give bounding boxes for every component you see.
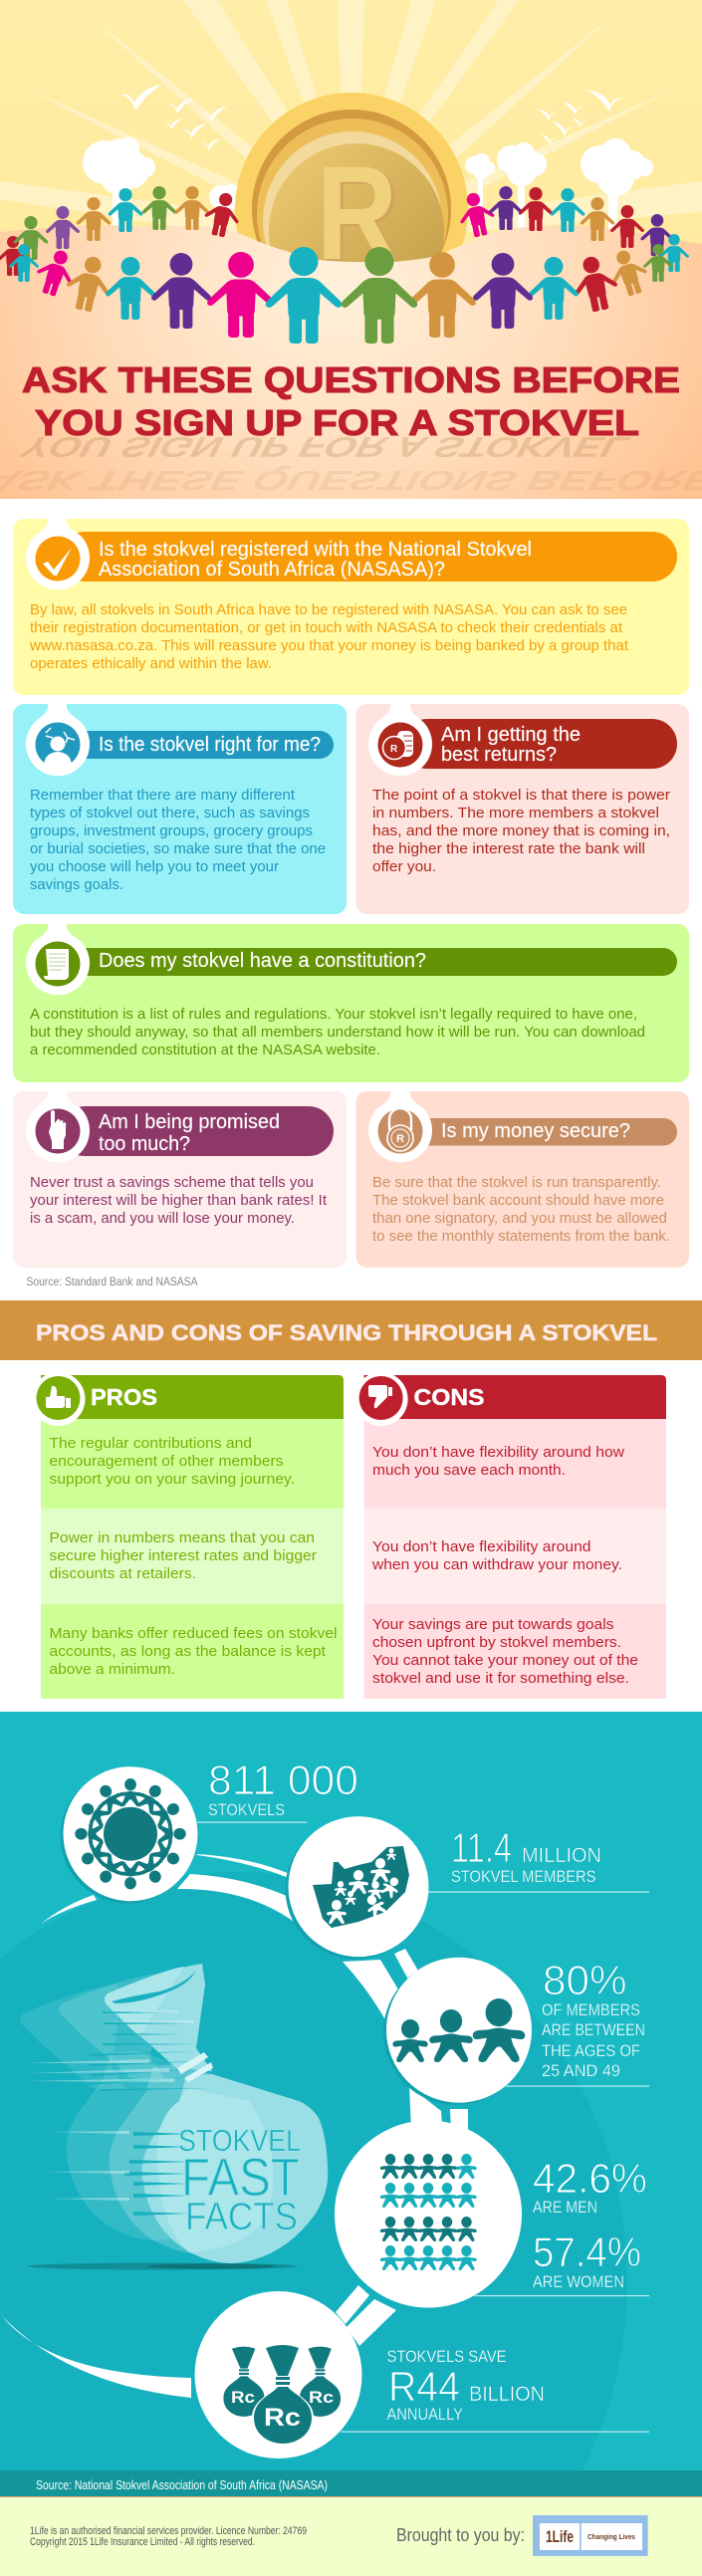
panel: NASASA registration bbox=[13, 519, 689, 695]
panel: money secure bbox=[356, 1091, 689, 1268]
text: right for me: or burial societies, so make sure that the one bbox=[30, 840, 326, 857]
text: right for me: groups, investment groups, grocery groups bbox=[30, 822, 313, 839]
text: pros: above a minimum. bbox=[50, 1661, 175, 1678]
panel: pros bbox=[32, 1372, 344, 1699]
text: constitution: a recommended constitution at the NASASA website. bbox=[30, 1042, 380, 1058]
text: best returns: The point of a stokvel is that there is power bbox=[372, 787, 670, 804]
icon: padlock: R bbox=[396, 1133, 404, 1145]
title bbox=[22, 359, 680, 443]
birds bbox=[121, 85, 621, 150]
text: registered: their registration documentation, or get in touch with NASASA to check their credentials at bbox=[30, 619, 623, 636]
heading: money secure: Is my money secure? bbox=[441, 1120, 630, 1142]
stat: R44 billion: BILLION bbox=[469, 2383, 545, 2406]
text: right for me: savings goals. bbox=[30, 876, 123, 893]
stat: R44 billion: R44 bbox=[388, 2363, 460, 2410]
text: pros: Many banks offer reduced fees on stokvel bbox=[50, 1625, 337, 1642]
stat: 80%: THE AGES OF bbox=[542, 2042, 640, 2060]
source band: Source: National Stokvel Association of South Africa (NASASA) bbox=[36, 2478, 328, 2492]
text: promised too much: is a scam, and you will lose your money. bbox=[30, 1210, 295, 1227]
circle: money bags: Rc bbox=[309, 2388, 334, 2407]
text: cons: stokvel and use it for something else. bbox=[372, 1670, 629, 1687]
text: promised too much bbox=[30, 1174, 328, 1227]
text: money secure: than one signatory, and you must be allowed bbox=[372, 1210, 667, 1227]
text: constitution: but they should anyway, so that all members understand how it will be run. You can download bbox=[30, 1024, 645, 1041]
text: constitution: A constitution is a list of rules and regulations. Your stokvel isn’t legally required to have one, bbox=[30, 1006, 637, 1023]
hill bbox=[0, 225, 702, 499]
circle: 811 000 stokvels bbox=[60, 1766, 197, 1904]
legal text: 1Life is an authorised financial services provider. Licence Number: 24769 bbox=[30, 2525, 307, 2537]
coin with rand symbol bbox=[235, 93, 468, 326]
text: money secure: Be sure that the stokvel is run transparently. bbox=[372, 1174, 661, 1191]
stat: 11.4 million: MILLION bbox=[522, 1844, 601, 1867]
text: best returns: the higher the interest rate the bank will bbox=[372, 840, 645, 857]
heading: best returns bbox=[441, 724, 581, 766]
circle: money bags: Rc bbox=[264, 2404, 301, 2432]
source: Standard Bank: Source: Standard Bank and NASASA bbox=[26, 1277, 198, 1288]
icon: raised hand bbox=[36, 1109, 80, 1153]
stat: men and women: 42.6% bbox=[533, 2155, 647, 2202]
stat: 811 000: 811 000 bbox=[208, 1756, 358, 1803]
heading: best returns: Am I getting the bbox=[441, 724, 581, 746]
brought to you by: Brought to you by: bbox=[396, 2525, 525, 2545]
title: ASK THESE QUESTIONS BEFORE bbox=[22, 359, 680, 400]
text: registered: By law, all stokvels in South Africa have to be registered with NASASA. You can ask to see bbox=[30, 601, 627, 618]
source band bbox=[0, 2470, 702, 2496]
stat: men and women: ARE MEN bbox=[533, 2199, 597, 2217]
text: cons: chosen upfront by stokvel members. bbox=[372, 1634, 621, 1651]
logo: 1Life: 1Life bbox=[546, 2527, 574, 2546]
stat: 80%: OF MEMBERS bbox=[542, 2001, 640, 2019]
text: registered: operates ethically and within the law. bbox=[30, 655, 272, 672]
coin with rand symbol: R bbox=[320, 141, 400, 290]
text: pros: The regular contributions and bbox=[50, 1435, 252, 1452]
text: pros: support you on your saving journey. bbox=[50, 1471, 295, 1488]
text: pros: discounts at retailers. bbox=[50, 1565, 196, 1582]
panel: stokvel fast facts bbox=[0, 1712, 702, 2576]
text: money secure: to see the monthly statements from the bank. bbox=[372, 1228, 670, 1245]
text: promised too much: Never trust a savings scheme that tells you bbox=[30, 1174, 314, 1191]
sun rays bbox=[0, 0, 702, 249]
text: pros: encouragement of other members bbox=[50, 1453, 283, 1470]
text: cons: much you save each month. bbox=[372, 1462, 566, 1479]
legal text: Copyright 2015 1Life Insurance Limited - All rights reserved. bbox=[30, 2536, 255, 2548]
heading: promised too much bbox=[99, 1111, 280, 1155]
stat: 11.4 million: 11.4 bbox=[451, 1824, 512, 1871]
heading: pros: PROS bbox=[91, 1384, 157, 1410]
heading: cons: CONS bbox=[414, 1384, 484, 1410]
panel: best returns bbox=[356, 704, 689, 914]
text: right for me: Remember that there are many different bbox=[30, 787, 296, 804]
heading: registered bbox=[99, 539, 532, 581]
panel: right for me bbox=[13, 704, 347, 914]
stat: 80%: 80% bbox=[543, 1957, 627, 2003]
icon: coins: R bbox=[390, 744, 398, 755]
text: cons: Your savings are put towards goals bbox=[372, 1616, 613, 1633]
text: money secure bbox=[372, 1174, 670, 1245]
section heading: pros and cons bbox=[0, 1300, 702, 1360]
text: pros bbox=[50, 1435, 337, 1678]
heading: promised too much: Am I being promised bbox=[99, 1111, 280, 1133]
heading: best returns: best returns? bbox=[441, 744, 557, 766]
icon: checkmark bbox=[36, 536, 80, 582]
icon: padlock bbox=[378, 1108, 422, 1153]
text: pros: accounts, as long as the balance is kept bbox=[50, 1643, 327, 1660]
stat: men and women: 57.4% bbox=[533, 2228, 641, 2275]
stat: men and women: ARE WOMEN bbox=[533, 2273, 624, 2291]
text: constitution bbox=[30, 1006, 645, 1058]
circle: age groups bbox=[383, 1958, 532, 2105]
title reflection bbox=[0, 430, 702, 496]
icon: thumbs down bbox=[354, 1372, 408, 1426]
heading: promised too much: too much? bbox=[99, 1133, 190, 1155]
bag title: FACTS bbox=[185, 2196, 298, 2238]
text: pros: Power in numbers means that you can bbox=[50, 1529, 315, 1546]
text: right for me bbox=[30, 787, 326, 893]
text: best returns: has, and the more money that is coming in, bbox=[372, 822, 670, 839]
text: promised too much: your interest will be higher than bank rates! It bbox=[30, 1192, 328, 1209]
heading: right for me: Is the stokvel right for me? bbox=[99, 734, 321, 756]
icon: scroll bbox=[36, 942, 80, 986]
text: registered bbox=[29, 601, 629, 672]
circle: money bags bbox=[195, 2291, 362, 2459]
logo: 1Life bbox=[533, 2515, 648, 2556]
text: cons: You don’t have flexibility around bbox=[372, 1538, 591, 1555]
people holding hands around the coin bbox=[0, 186, 689, 344]
text: cons: You don’t have flexibility around how bbox=[372, 1444, 624, 1461]
heading: registered: Association of South Africa (NASASA)? bbox=[99, 559, 445, 581]
text: best returns: in numbers. The more members a stokvel bbox=[372, 805, 659, 821]
stat: R44 billion bbox=[341, 2348, 649, 2433]
stat: 80%: ARE BETWEEN bbox=[542, 2021, 645, 2039]
bag title bbox=[178, 2123, 301, 2238]
text: cons: when you can withdraw your money. bbox=[371, 1556, 622, 1573]
panel: promised too much bbox=[13, 1091, 347, 1268]
text: right for me: types of stokvel out there, such as savings bbox=[30, 805, 310, 821]
title: YOU SIGN UP FOR A STOKVEL bbox=[35, 402, 639, 443]
money bag with FAST FACTS bbox=[20, 1964, 328, 2270]
bag title: STOKVEL bbox=[178, 2123, 301, 2158]
text: pros: secure higher interest rates and bigger bbox=[50, 1547, 317, 1564]
panel: cons bbox=[354, 1372, 666, 1699]
stat: men and women bbox=[475, 2155, 649, 2296]
title reflection: YOU SIGN UP FOR A STOKVEL bbox=[15, 430, 636, 462]
stat: 11.4 million: STOKVEL MEMBERS bbox=[451, 1868, 595, 1886]
circle: men and women bbox=[335, 2121, 522, 2308]
coin with rand symbol: R bbox=[317, 139, 397, 288]
heading: constitution: Does my stokvel have a constitution? bbox=[99, 950, 426, 972]
connector arcs bbox=[2, 1854, 468, 2398]
circle: South Africa map bbox=[285, 1816, 428, 1960]
stat: 80%: 25 AND 49 bbox=[542, 2062, 620, 2080]
stat: 811 000: STOKVELS bbox=[208, 1801, 285, 1819]
motion streaks bbox=[88, 1971, 212, 2216]
bag title: FAST bbox=[181, 2148, 300, 2208]
text: money secure: The stokvel bank account should have more bbox=[372, 1192, 664, 1209]
heading: registered: Is the stokvel registered with the National Stokvel bbox=[99, 539, 532, 561]
text: cons: You cannot take your money out of the bbox=[372, 1652, 638, 1669]
section heading: pros and cons: PROS AND CONS OF SAVING THROUGH A STOKVEL bbox=[36, 1320, 657, 1345]
circle: money bags: Rc bbox=[231, 2388, 255, 2407]
logo: 1Life: Changing Lives bbox=[587, 2532, 635, 2541]
panel: constitution bbox=[13, 924, 689, 1082]
stat: R44 billion: ANNUALLY bbox=[386, 2406, 463, 2424]
icon: person with network bbox=[36, 723, 80, 768]
text: cons bbox=[371, 1444, 638, 1687]
text: registered: www.nasasa.co.za. This will reassure you that your money is being banked by a group that bbox=[29, 637, 629, 654]
stat: 11.4 million bbox=[428, 1824, 649, 1893]
trees bbox=[83, 137, 653, 241]
text: right for me: you choose will help you to meet your bbox=[30, 858, 279, 875]
icon: thumbs up bbox=[32, 1372, 86, 1426]
stat: R44 billion: STOKVELS SAVE bbox=[386, 2348, 506, 2366]
icon: coins bbox=[378, 723, 422, 767]
text: best returns bbox=[372, 787, 670, 875]
legal text bbox=[30, 2525, 307, 2548]
footer bbox=[0, 2497, 702, 2576]
hero illustration bbox=[0, 0, 702, 499]
stat: 80% bbox=[506, 1957, 649, 2087]
text: best returns: offer you. bbox=[372, 858, 436, 875]
stat: 811 000 bbox=[197, 1756, 358, 1823]
